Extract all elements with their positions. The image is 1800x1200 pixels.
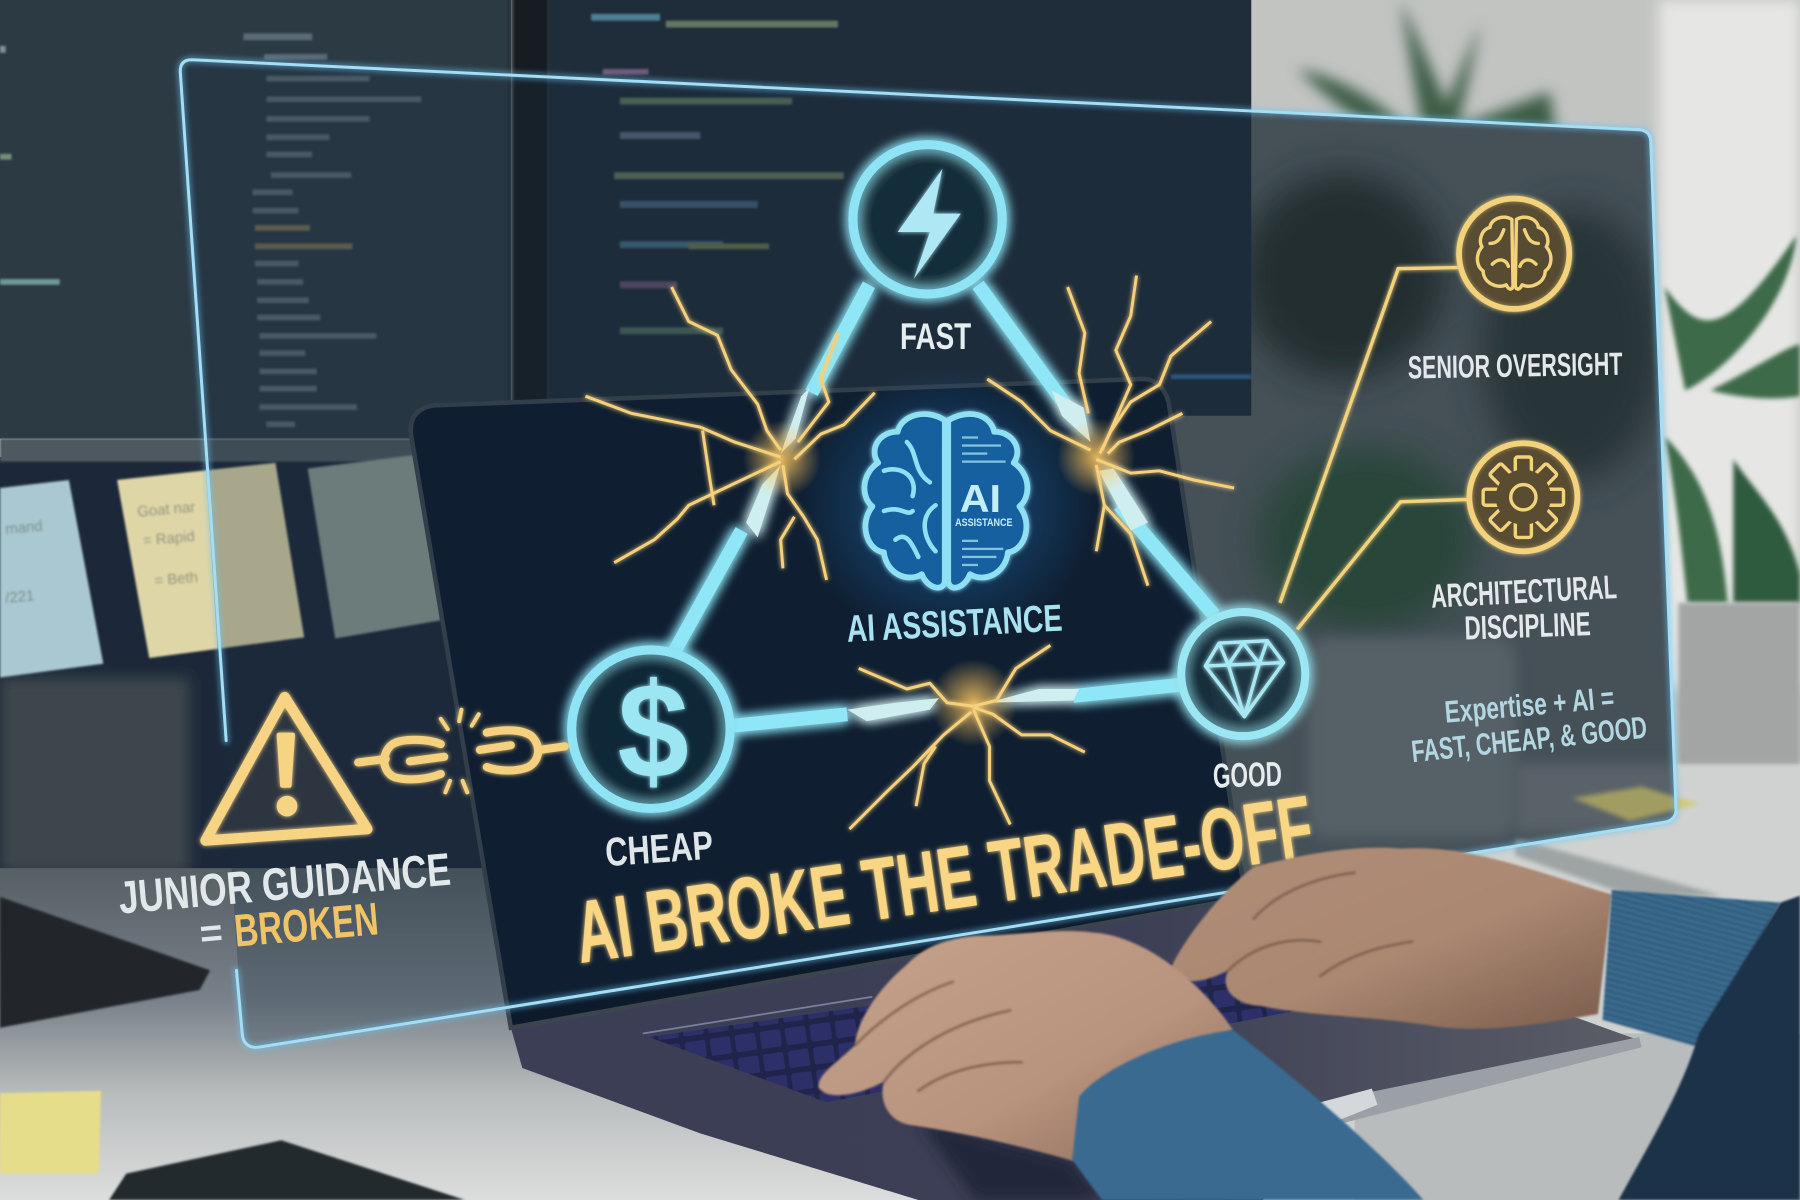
sticky notes: = Beth: [154, 569, 199, 590]
holographic panel: [180, 60, 1676, 1047]
text: expertise summary: FAST, CHEAP, & GOOD: [1410, 710, 1649, 769]
label: good: GOOD: [1212, 755, 1283, 796]
label: senior oversight: SENIOR OVERSIGHT: [1407, 346, 1623, 386]
centre glow: [798, 367, 1096, 643]
laptop: [411, 379, 1642, 1200]
sticky notes: /221: [5, 587, 35, 607]
text: junior guidance broken: [116, 843, 453, 957]
sticky notes: = Rapid: [142, 528, 195, 549]
monitor: centre: [511, 0, 1251, 425]
sticky notes: mand: [5, 518, 43, 538]
connectors: gold lines: [1280, 268, 1467, 629]
label: architectural discipline: DISCIPLINE: [1464, 606, 1591, 648]
monitor: left: [0, 0, 511, 462]
icon: warning triangle: [205, 697, 367, 841]
text: expertise summary: Expertise + AI =: [1443, 680, 1615, 730]
node: senior oversight: [1459, 199, 1569, 309]
text: junior guidance broken: =: [198, 911, 225, 956]
icon: dollar sign: $: [618, 654, 689, 806]
hands and sleeves: [818, 848, 1800, 1200]
label: cheap: CHEAP: [604, 823, 715, 875]
label: architectural discipline: ARCHITECTURAL: [1430, 569, 1618, 616]
text: AI: AI: [960, 478, 1001, 521]
desk items: [0, 787, 1722, 1200]
icon: gold brain: [1477, 217, 1551, 289]
node: fast: [853, 145, 1002, 294]
title: AI BROKE THE TRADE-OFF: [569, 777, 1319, 982]
label: architectural discipline: [1430, 569, 1618, 648]
sparks: [441, 710, 479, 792]
node: cheap: [572, 650, 730, 808]
node: good: [1181, 612, 1305, 736]
text: expertise summary: [1410, 680, 1649, 769]
label: AI assistance: AI ASSISTANCE: [846, 598, 1063, 651]
icon: diamond: [1205, 641, 1283, 717]
icon: central AI brain: [864, 414, 1027, 588]
label: fast: FAST: [900, 316, 972, 357]
triangle edges: [673, 285, 1215, 726]
node: architectural discipline: [1469, 443, 1577, 551]
icon: lightning bolt: [898, 169, 961, 279]
text: junior guidance broken: BROKEN: [232, 892, 381, 957]
icon: broken chain: [358, 710, 565, 792]
text: assistance: ASSISTANCE: [955, 517, 1013, 529]
sticky notes: [0, 454, 442, 678]
sticky notes: Goat nar: [137, 499, 196, 521]
cracks: fractures: [585, 276, 1234, 829]
icon: gear: [1483, 457, 1564, 537]
text: junior guidance broken: JUNIOR GUIDANCE: [116, 843, 453, 924]
